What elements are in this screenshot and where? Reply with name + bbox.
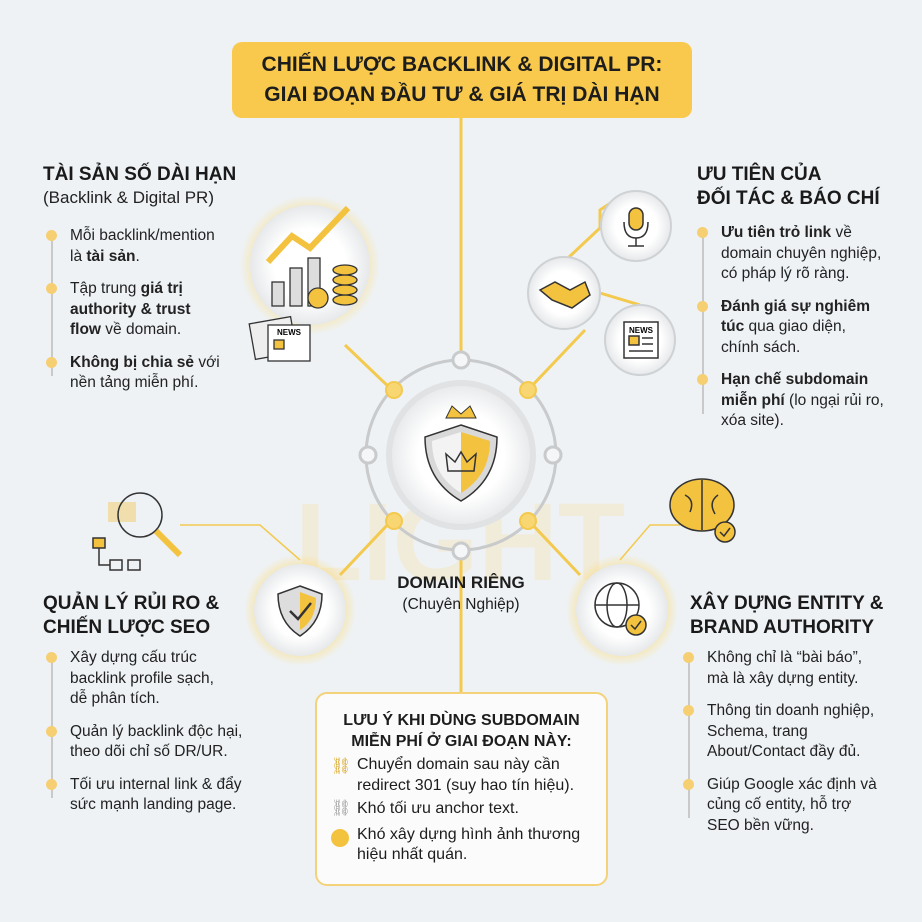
bullets: Xây dựng cấu trúc	[70, 649, 197, 666]
icon circles	[240, 195, 380, 335]
heading: BRAND AUTHORITY	[690, 617, 874, 638]
bullets	[683, 648, 878, 848]
heading	[690, 592, 883, 638]
items	[331, 756, 580, 863]
icon: brain	[670, 479, 735, 542]
bullets: Ưu tiên trỏ link về domain chuyên nghiệp, có pháp lý rõ ràng.	[721, 224, 881, 282]
heading	[43, 592, 219, 638]
bullets: dễ phân tích.	[70, 690, 160, 707]
heading: ƯU TIÊN CỦA	[697, 164, 821, 185]
icon: globe	[595, 583, 646, 635]
bullets: backlink profile sạch,	[70, 670, 214, 686]
bullets: Không bị chia sẻ với nền tảng miễn phí.	[70, 354, 220, 391]
items: Khó xây dựng hình ảnh thương hiệu nhất quán.	[357, 826, 580, 863]
title: CHIẾN LƯỢC BACKLINK & DIGITAL PR:	[262, 53, 662, 76]
center label: DOMAIN RIÊNG	[397, 573, 525, 592]
icon: news	[624, 322, 658, 358]
heading: CHIẾN LƯỢC SEO	[43, 617, 210, 638]
items: Khó tối ưu anchor text.	[357, 800, 519, 817]
panel: ưu tiên đối tác	[697, 162, 884, 429]
heading: ĐỐI TÁC & BÁO CHÍ	[697, 188, 880, 209]
background diagram: NEWS	[629, 326, 654, 335]
icon: shield check	[278, 586, 322, 636]
bullets: Giúp Google xác định và củng cố entity, hỗ trợ SEO bền vững.	[707, 776, 877, 834]
heading: TÀI SẢN SỐ DÀI HẠN	[43, 164, 236, 185]
items: ⛓	[331, 800, 351, 817]
bullets: Hạn chế subdomain miễn phí (lo ngại rủi ro, xóa site).	[721, 371, 884, 429]
title: GIAI ĐOẠN ĐẦU TƯ & GIÁ TRỊ DÀI HẠN	[264, 83, 660, 106]
panel: tài sản số dài hạn	[43, 162, 236, 391]
bullets: Thông tin doanh nghiệp, Schema, trang About/Contact đầy đủ.	[707, 702, 874, 760]
heading	[343, 710, 580, 750]
heading	[697, 162, 880, 209]
panel: quản lý rủi ro	[43, 592, 242, 813]
bullets	[46, 648, 261, 828]
panel: lưu ý subdomain	[315, 692, 608, 886]
icon: mic	[624, 208, 648, 246]
heading: XÂY DỰNG ENTITY &	[690, 593, 883, 614]
bullets	[697, 223, 887, 444]
icon: search hierarchy	[93, 493, 180, 570]
center ring	[366, 360, 556, 550]
bullets: theo dõi chỉ số DR/UR.	[70, 743, 228, 760]
heading: MIỄN PHÍ Ở GIAI ĐOẠN NÀY:	[351, 733, 572, 750]
center label	[397, 573, 525, 613]
bullets: sức mạnh landing page.	[70, 796, 236, 813]
items: ⛓	[331, 758, 351, 775]
bullets: Không chỉ là “bài báo”, mà là xây dựng entity.	[707, 649, 862, 686]
watermark: LIGHT	[295, 481, 625, 604]
icon: chart	[249, 208, 357, 361]
bullets	[46, 226, 222, 406]
items: Chuyển domain sau này cần redirect 301 (suy hao tín hiệu).	[357, 756, 574, 794]
title	[232, 42, 692, 118]
background diagram: NEWS	[277, 328, 302, 337]
subtitle: (Backlink & Digital PR)	[43, 188, 214, 207]
bullets: Mỗi backlink/mention là tài sản.	[70, 227, 215, 264]
connector lines	[180, 118, 680, 692]
icon: handshake	[540, 282, 590, 308]
bullets: Quản lý backlink độc hại,	[70, 722, 242, 740]
panel: entity	[683, 592, 883, 834]
center label: (Chuyên Nghiệp)	[402, 596, 520, 613]
heading: QUẢN LÝ RỦI RO &	[43, 593, 219, 614]
heading: LƯU Ý KHI DÙNG SUBDOMAIN	[343, 712, 580, 729]
bullets: Tập trung giá trị authority & trust flow về domain.	[70, 280, 191, 338]
icon: center shield crown	[425, 406, 497, 501]
bullets: Đánh giá sự nghiêm túc qua giao diện, chính sách.	[721, 298, 870, 356]
bullets: Tối ưu internal link & đẩy	[70, 776, 241, 792]
